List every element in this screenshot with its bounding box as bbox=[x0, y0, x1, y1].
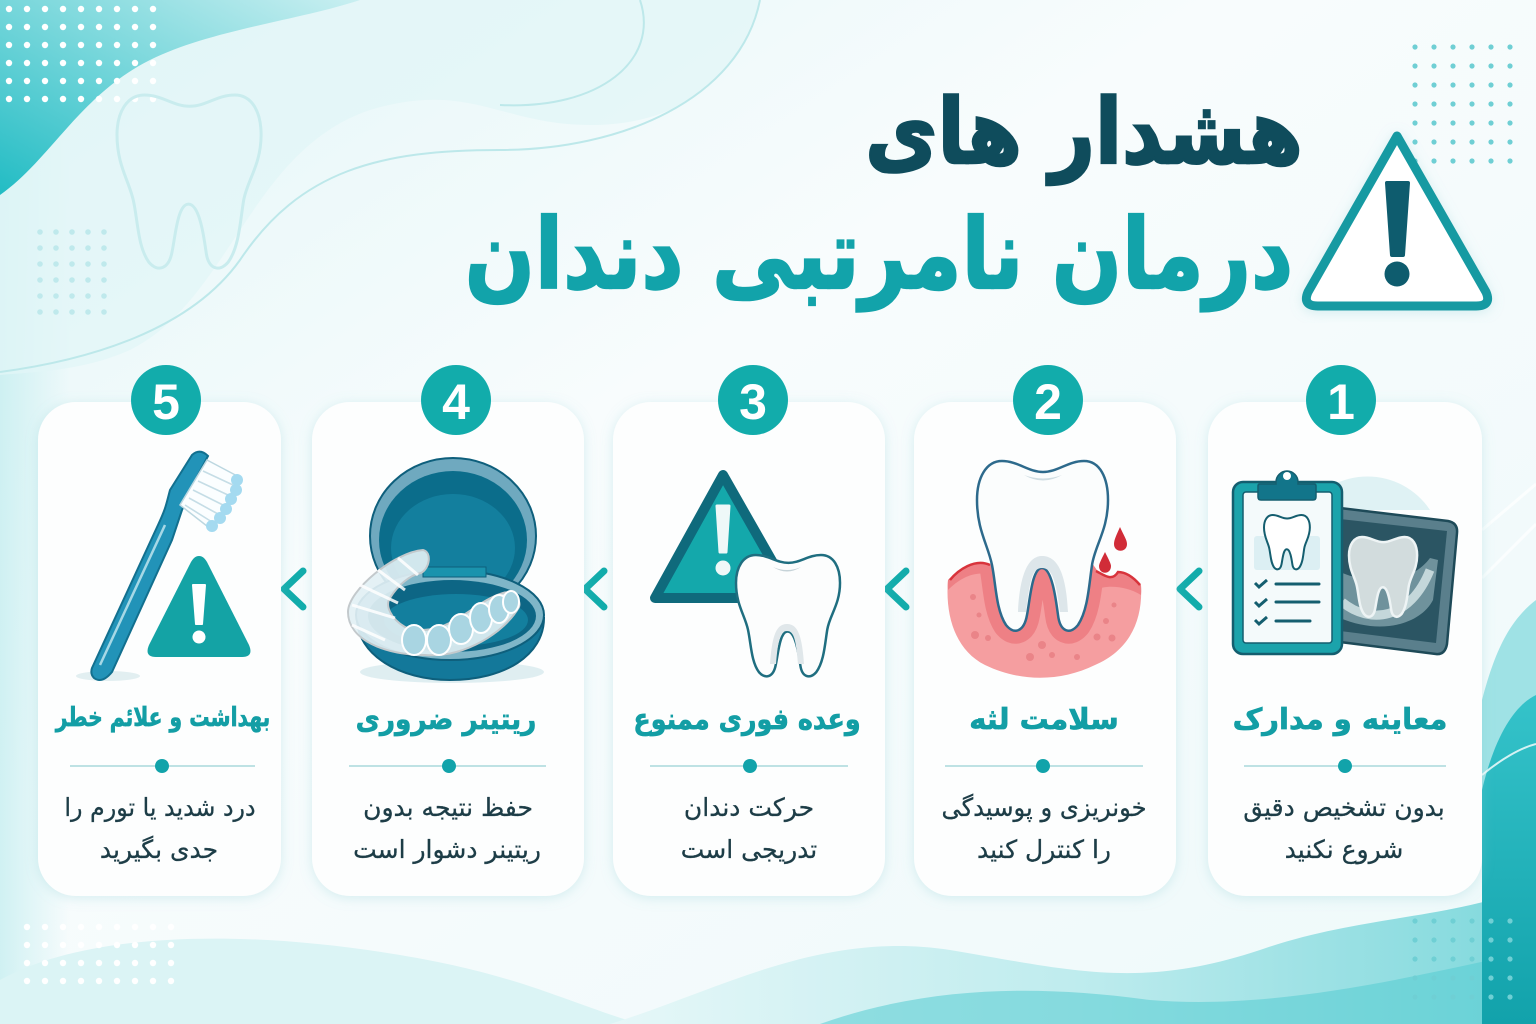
icon: clipboard and x-ray bbox=[1233, 471, 1457, 654]
title line 2: درمان نامرتبی دندان bbox=[465, 198, 1293, 312]
icon: title warning triangle bbox=[1306, 136, 1488, 306]
heading 4: ریتینر ضروری bbox=[356, 702, 536, 736]
panel: card 4 bbox=[312, 365, 584, 896]
body text 3: تدریجی است bbox=[681, 835, 817, 864]
panel: card 5 bbox=[38, 365, 281, 896]
body text 2: را کنترل کنید bbox=[977, 835, 1111, 864]
body text 2 bbox=[941, 793, 1147, 864]
badge 3 bbox=[718, 365, 788, 435]
divider 2 bbox=[945, 759, 1143, 773]
body text 1: بدون تشخیص دقیق bbox=[1243, 793, 1445, 823]
watermark tooth bbox=[117, 95, 261, 268]
icon: retainer case bbox=[348, 458, 544, 683]
arrow bbox=[585, 571, 604, 607]
badge 1: 1 bbox=[1327, 374, 1355, 430]
body text 2: خونریزی و پوسیدگی bbox=[941, 793, 1147, 822]
heading 1: معاینه و مدارک bbox=[1233, 702, 1447, 736]
panel: card 3 bbox=[613, 365, 885, 896]
badge 2 bbox=[1013, 365, 1083, 435]
body text 4: حفظ نتیجه بدون bbox=[363, 793, 533, 823]
title line 1: هشدار های bbox=[865, 79, 1303, 185]
body text 3 bbox=[681, 793, 817, 864]
body text 4 bbox=[353, 793, 541, 864]
arrow bbox=[284, 571, 303, 607]
body text 1: شروع نکنید bbox=[1285, 835, 1403, 865]
icon: toothbrush and warning triangle bbox=[76, 452, 250, 681]
panel: card 2 bbox=[914, 365, 1176, 896]
badge 3: 3 bbox=[739, 374, 767, 430]
heading 5: بهداشت و علائم خطر bbox=[55, 703, 270, 733]
body text 4: ریتینر دشوار است bbox=[353, 835, 541, 864]
body text 5 bbox=[64, 792, 256, 864]
body text 3: حرکت دندان bbox=[684, 793, 814, 822]
body text 5: درد شدید یا تورم را bbox=[64, 792, 256, 822]
panel: card 1 bbox=[1208, 365, 1482, 896]
badge 2: 2 bbox=[1034, 374, 1062, 430]
badge 4 bbox=[421, 365, 491, 435]
icon: bleeding gum and tooth bbox=[946, 461, 1145, 678]
heading 3: وعده فوری ممنوع bbox=[633, 703, 861, 736]
arrow bbox=[1180, 571, 1199, 607]
divider 4 bbox=[349, 759, 546, 773]
badge 5: 5 bbox=[152, 374, 180, 430]
divider 1 bbox=[1244, 759, 1446, 773]
icon: warning triangle with tooth bbox=[655, 475, 840, 676]
badge 1 bbox=[1306, 365, 1376, 435]
body text 1 bbox=[1243, 793, 1445, 865]
arrow bbox=[887, 571, 906, 607]
heading 2: سلامت لثه bbox=[969, 702, 1119, 736]
divider 5 bbox=[70, 759, 255, 773]
body text 5: جدی بگیرید bbox=[100, 835, 218, 864]
badge 5 bbox=[131, 365, 201, 435]
divider 3 bbox=[650, 759, 848, 773]
badge 4: 4 bbox=[442, 374, 470, 430]
